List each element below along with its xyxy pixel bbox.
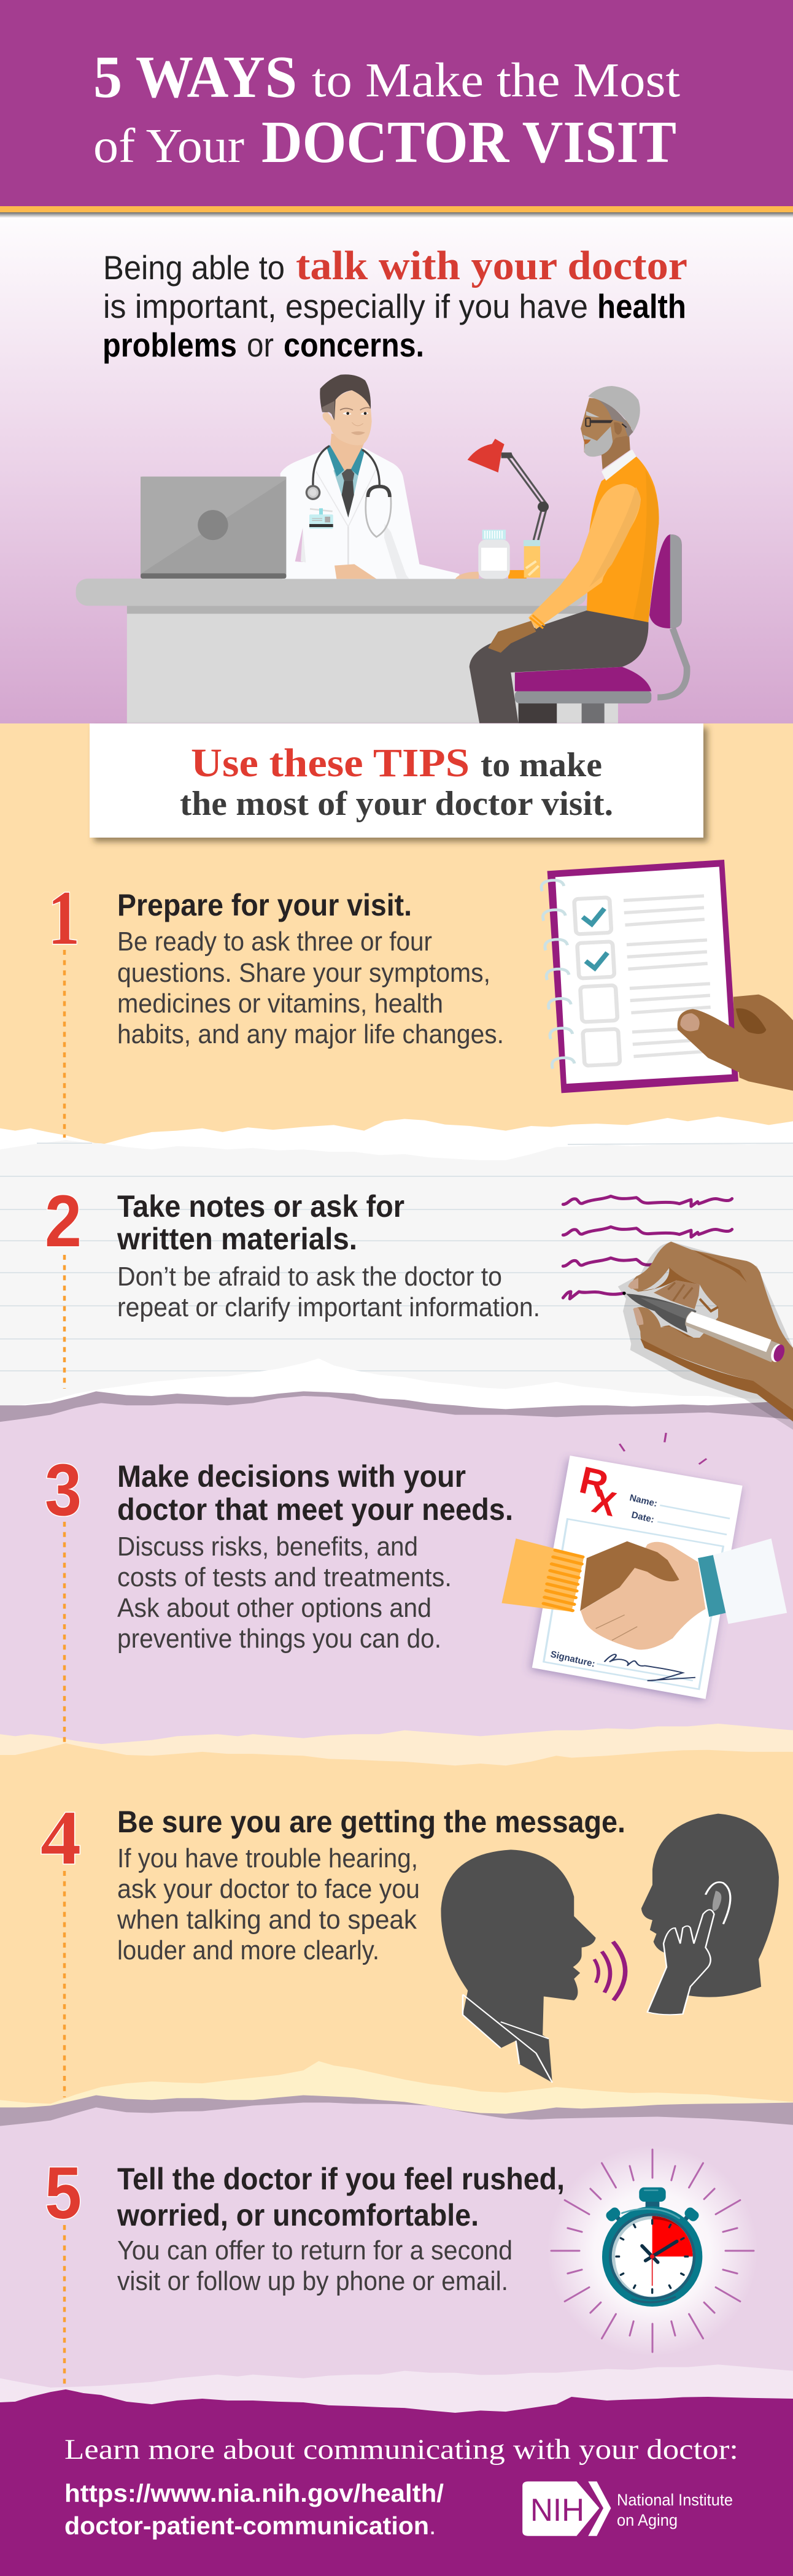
desk lamp: [468, 439, 549, 540]
illustration: doctor and patient at desk: [76, 374, 687, 723]
panel background: footer: [0, 2364, 793, 2576]
intro text: [103, 243, 687, 364]
panel: step 1: [48, 860, 793, 1093]
step 2 heading: Take notes or ask for: [117, 1189, 404, 1224]
header shadow: [0, 212, 793, 218]
icon: hand writing notes: [563, 1196, 793, 1430]
NIH logo: National Institute: [617, 2491, 733, 2509]
panel background: step 1: [0, 723, 793, 1165]
intro text: or: [247, 326, 274, 364]
tips banner: [90, 723, 703, 838]
step 2 heading: [117, 1189, 404, 1256]
step 2 heading: written materials.: [117, 1222, 357, 1256]
footer link: doctor-patient-communication: [64, 2512, 429, 2540]
panel background: step 3: [0, 1359, 793, 1749]
intro text: health: [597, 287, 686, 325]
timeline: dotted connectors: [63, 950, 66, 2384]
step 1 body: questions. Share your symptoms,: [117, 958, 490, 988]
step 3 body: preventive things you can do.: [117, 1624, 441, 1654]
title: of Your: [93, 120, 244, 173]
title: [93, 44, 680, 175]
tips banner: Use these TIPS: [191, 741, 470, 785]
footer call to action: Learn more about communicating with your doctor:: [64, 2434, 738, 2466]
number 2: 2: [45, 1180, 82, 1262]
footer link: .: [429, 2512, 436, 2540]
icon: prescription and handshake: R: [576, 1459, 612, 1506]
header gold rule: [0, 206, 793, 212]
step 5 heading: worried, or uncomfortable.: [117, 2198, 479, 2232]
intro text: concerns.: [284, 326, 424, 364]
icon: stopwatch: [547, 2145, 758, 2356]
title: 5 WAYS: [93, 44, 297, 110]
desk: [76, 579, 618, 723]
step 4 body: louder and more clearly.: [117, 1935, 379, 1965]
tips banner: the most of your doctor visit.: [180, 785, 613, 823]
step 2 body: Don’t be afraid to ask the doctor to: [117, 1262, 502, 1292]
icon: prescription and handshake: Name:: [629, 1492, 659, 1509]
step 5 heading: Tell the doctor if you feel rushed,: [117, 2162, 565, 2196]
panel: step 2: [45, 1180, 793, 1430]
icon: prescription and handshake: Signature:: [549, 1649, 596, 1670]
step 3 body: Ask about other options and: [117, 1593, 431, 1623]
step 2 body: [117, 1262, 540, 1322]
panel: step 4: [41, 1795, 779, 2083]
step 1 body: Be ready to ask three or four: [117, 927, 432, 957]
step 5 body: [117, 2235, 513, 2296]
panel: footer: [64, 2434, 738, 2540]
doctor: [280, 374, 479, 579]
step 5 heading: [117, 2162, 565, 2232]
icon: prescription and handshake: [501, 1433, 787, 1699]
icon: speaker and listener silhouettes: [441, 1814, 779, 2083]
icon: prescription and handshake: X: [589, 1481, 620, 1524]
panel background: step 2: [0, 1117, 793, 1457]
intro text: Being able to: [103, 249, 285, 287]
icon: prescription and handshake: Date:: [630, 1510, 655, 1525]
header band: [0, 0, 793, 207]
step 4 body: ask your doctor to face you: [117, 1874, 420, 1904]
title: to Make the Most: [312, 54, 680, 107]
intro text: talk with your doctor: [296, 243, 687, 288]
intro text: problems: [103, 326, 237, 364]
step 3 body: costs of tests and treatments.: [117, 1562, 452, 1592]
panel: step 5: [45, 2145, 758, 2356]
step 4 heading: Be sure you are getting the message.: [117, 1805, 625, 1839]
title: DOCTOR VISIT: [261, 109, 676, 175]
step 3 body: Discuss risks, benefits, and: [117, 1532, 418, 1562]
step 5 body: visit or follow up by phone or email.: [117, 2266, 508, 2296]
number 4: 4: [41, 1795, 81, 1881]
step 4 body: when talking and to speak: [117, 1905, 417, 1935]
panel background: step 4: [0, 1724, 793, 2117]
intro text: is important, especially if you have: [103, 287, 588, 325]
number 1: 1: [48, 876, 80, 961]
step 1 body: habits, and any major life changes.: [117, 1019, 504, 1049]
tips banner: to make: [481, 746, 602, 784]
step 1 heading: Prepare for your visit.: [117, 888, 412, 922]
NIH logo: [522, 2482, 733, 2536]
step 1 body: [117, 927, 504, 1049]
step 3 heading: doctor that meet your needs.: [117, 1492, 513, 1527]
NIH logo: on Aging: [617, 2511, 678, 2529]
footer link: https://www.nia.nih.gov/health/: [64, 2479, 444, 2507]
step 3 heading: Make decisions with your: [117, 1459, 466, 1494]
step 4 body: [117, 1843, 420, 1965]
medicine bottles: [478, 530, 540, 579]
footer link: [64, 2479, 444, 2540]
step 1 body: medicines or vitamins, health: [117, 989, 443, 1019]
patient on chair: [470, 386, 687, 723]
panel: header: [0, 0, 793, 218]
number 3: 3: [45, 1449, 82, 1531]
NIH logo: NIH: [530, 2493, 584, 2528]
panel: step 3: [45, 1433, 787, 1699]
panel background: step 5: [0, 2061, 793, 2393]
step 3 heading: [117, 1459, 513, 1527]
step 4 body: If you have trouble hearing,: [117, 1843, 418, 1873]
laptop: [141, 477, 286, 579]
step 2 body: repeat or clarify important information.: [117, 1292, 540, 1322]
icon: checklist held in hand: [541, 860, 793, 1093]
step 3 body: [117, 1532, 452, 1654]
step 5 body: You can offer to return for a second: [117, 2235, 513, 2266]
panel background: intro: [0, 212, 793, 724]
number 5: 5: [45, 2152, 82, 2234]
